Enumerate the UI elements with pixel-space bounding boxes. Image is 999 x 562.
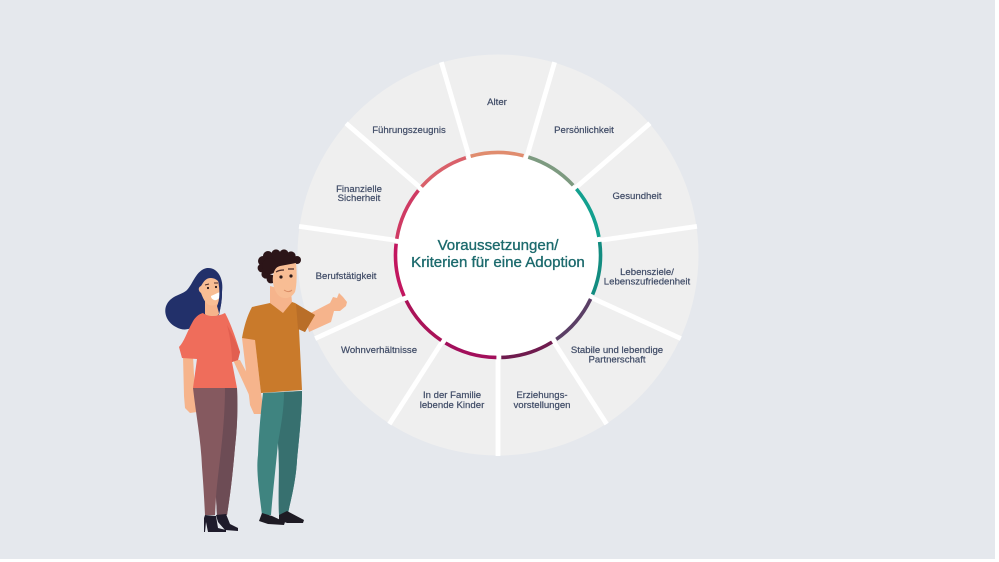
label: Berufstätigkeit: Berufstätigkeit [316,271,377,282]
label: Wohnverhältnisse: Wohnverhältnisse [341,345,417,356]
illustration: man [242,249,347,525]
label: Lebensziele: Lebensziele/ [620,267,674,278]
label: Führungszeugnis: Führungszeugnis [372,125,446,136]
center title: Voraussetzungen/ [438,237,559,254]
label: In der Familie lebende Kinder: lebende Kinder [420,400,485,411]
colored ring segments [353,110,643,400]
wheel background disc [298,54,698,456]
center title: Kriterien für eine Adoption [411,254,585,271]
label: Stabile und lebendige Partnerschaft: Partnerschaft [588,354,646,366]
label: Finanzielle Sicherheit: Finanzielle [336,184,382,195]
label: Stabile und lebendige Partnerschaft: Stabile und lebendige [571,345,663,356]
label: Erziehungsvorstellungen: vorstellungen [513,400,571,411]
label: Alter: Alter [487,97,508,108]
label: Persönlichkeit: Persönlichkeit [554,125,614,136]
center white disc [395,152,601,358]
label: Gesundheit: Gesundheit [612,191,662,202]
label: Erziehungsvorstellungen: Erziehungs- [516,390,568,401]
label: Lebensziele: Lebenszufriedenheit [604,276,691,288]
wheel of adoption criteria [298,54,698,456]
label: Finanzielle Sicherheit: Sicherheit [338,193,381,204]
label: In der Familie lebende Kinder: In der Familie [423,390,481,401]
illustration: woman [165,268,263,532]
